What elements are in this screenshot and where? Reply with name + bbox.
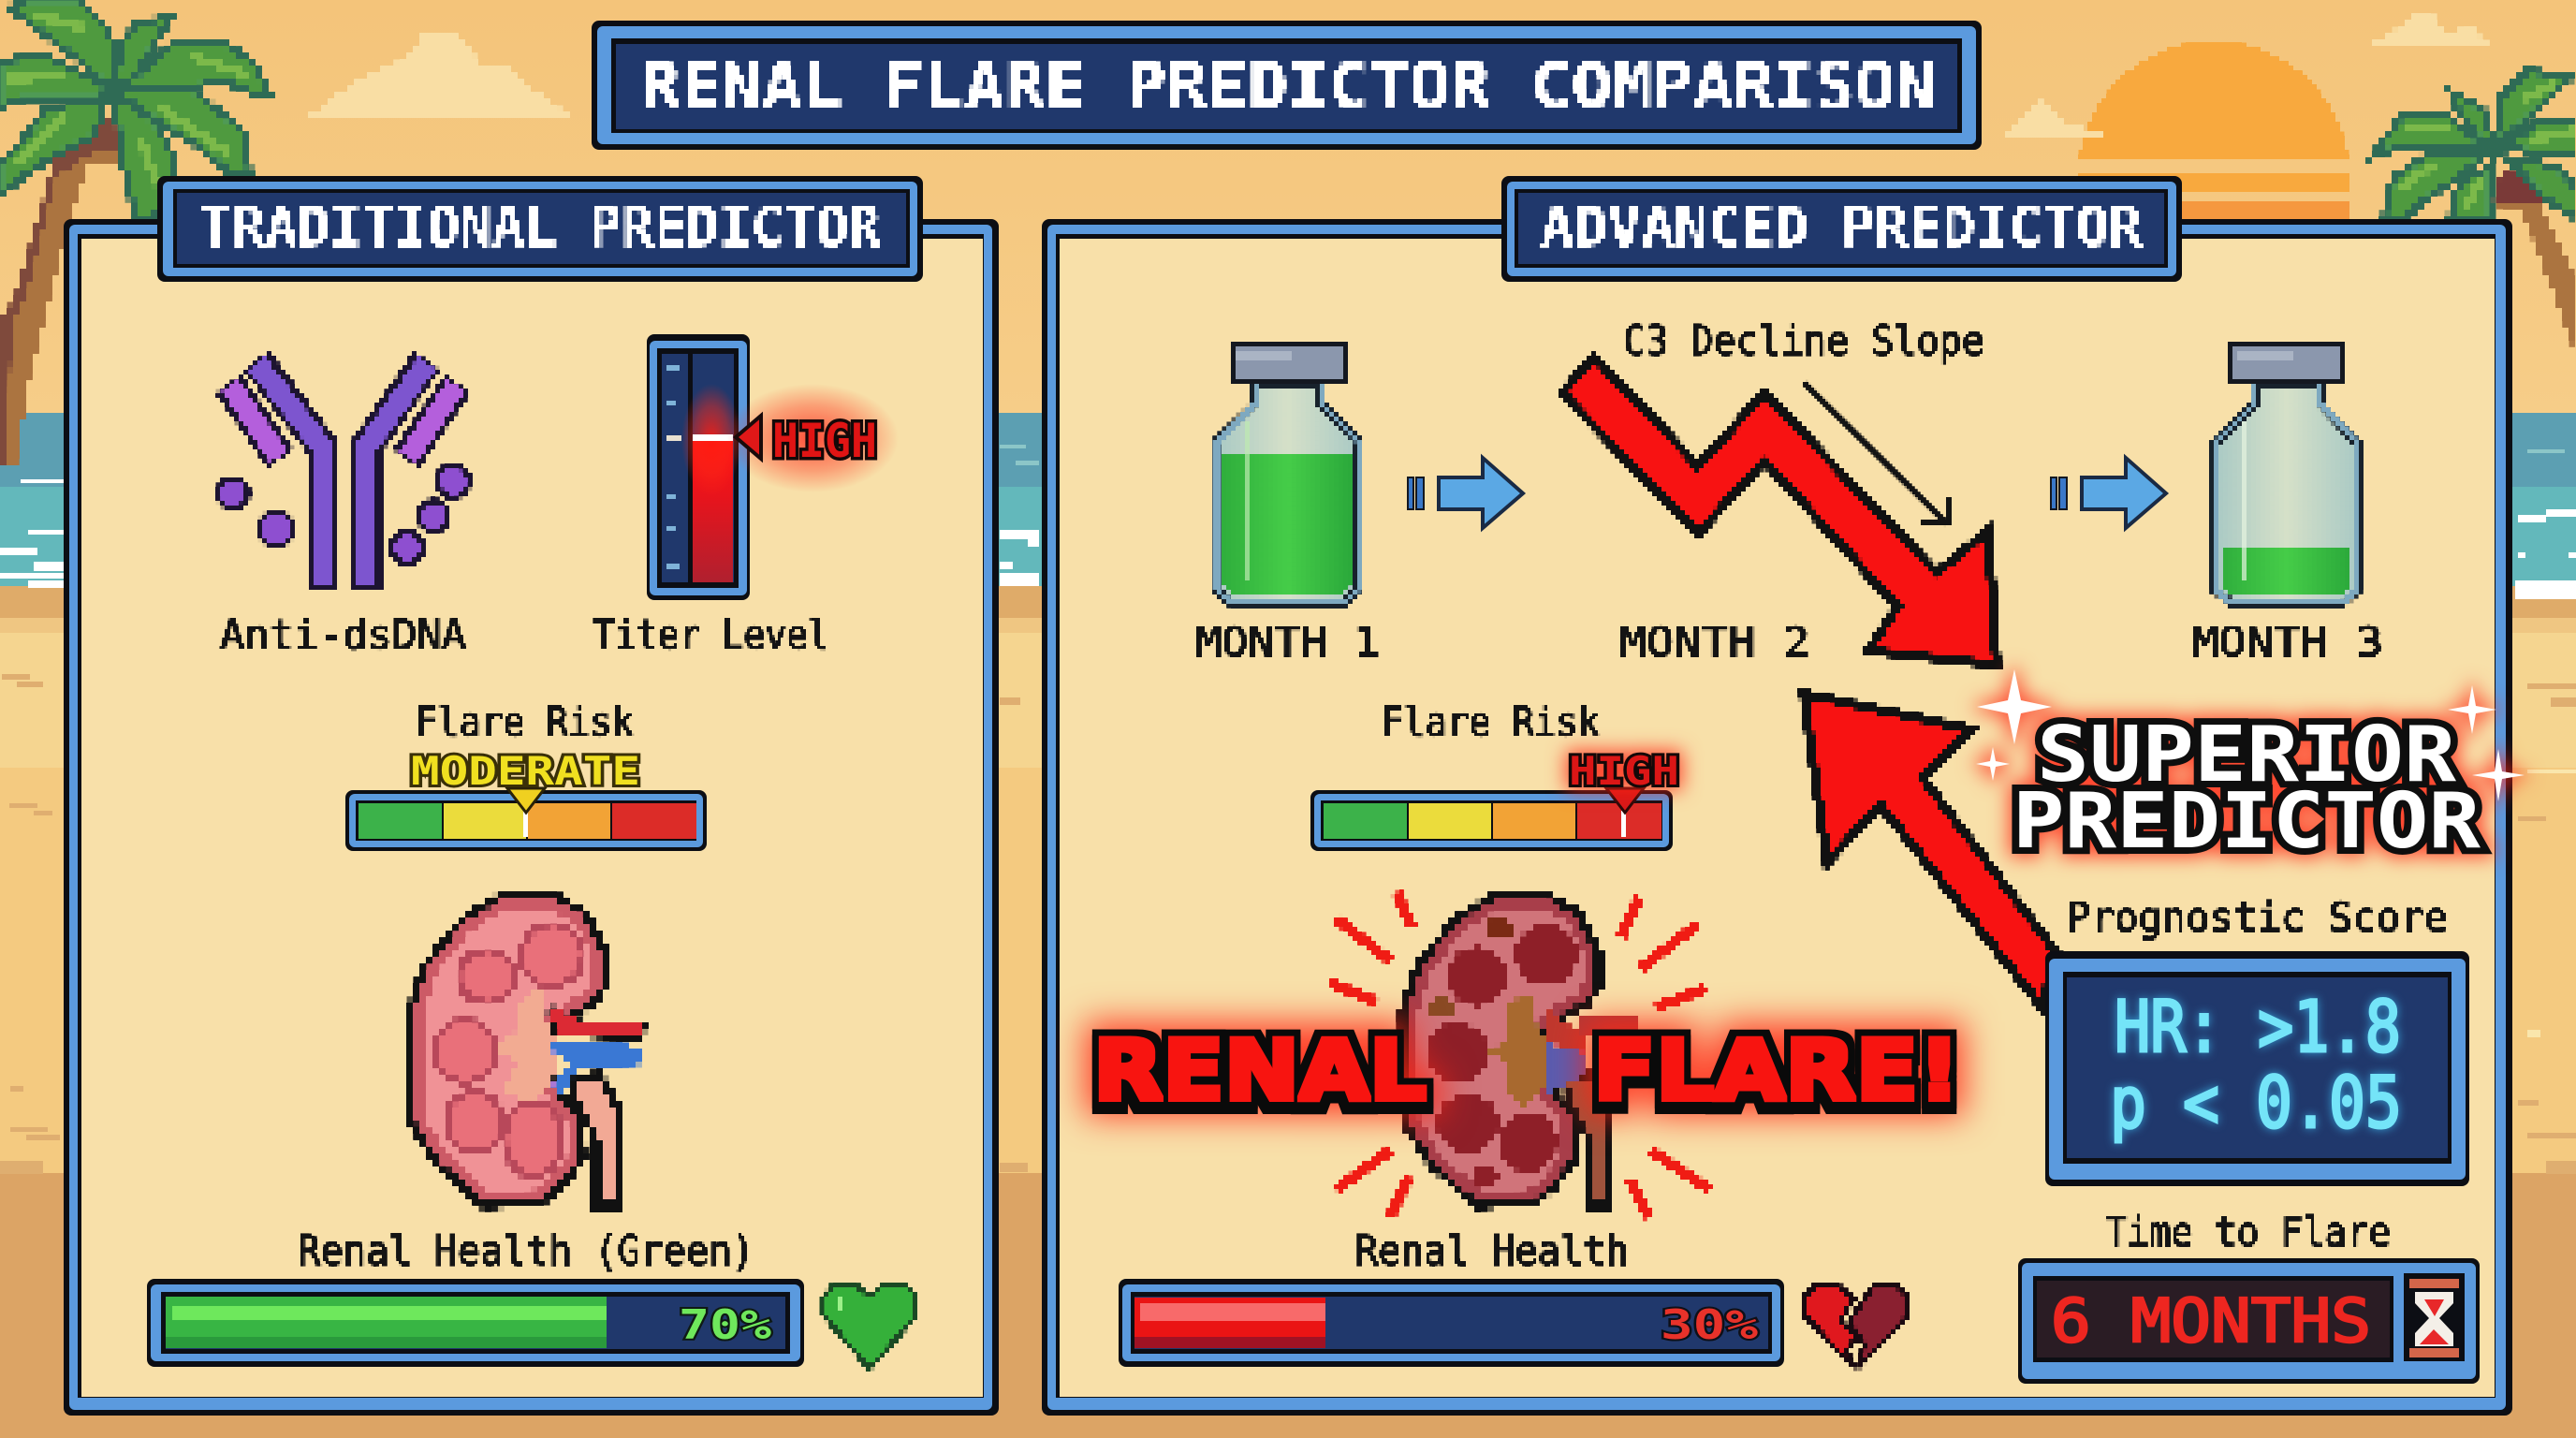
icon: hourglass [2404,1273,2465,1361]
value: 30%: 30% [1661,1301,1759,1349]
value: HR: HR: >1.8 [2115,985,2401,1068]
heading: traditional predictor [157,176,923,282]
callout: superior predictor [1976,669,2525,866]
label: month 3: MONTH 3 [2191,619,2383,667]
value: 6 months: 6 MONTHS [2051,1287,2371,1357]
label: prognostic score: Prognostic Score [2067,894,2448,942]
label: renal health green: Renal Health (Green) [298,1227,754,1275]
arrow: red pointing at flare risk [1804,694,2056,1006]
label: flare risk right: Flare Risk [1382,698,1600,746]
value: p value: p < 0.05 [2110,1061,2402,1144]
heading: traditional predictor: TRADITIONAL PREDICTOR [200,195,882,260]
icon: healthy kidney [409,897,646,1206]
arrow: red zig-zag decline [1562,357,1997,665]
icon: damaged kidney [1402,897,1636,1206]
left palm tree [0,0,269,466]
heading: advanced predictor [1501,176,2182,282]
callout: superior predictor: PREDICTOR [2012,777,2481,866]
callout: superior predictor: SUPERIOR [2037,711,2457,800]
panel: time to flare [2018,1258,2480,1384]
label: C3 decline slope: C3 Decline Slope [1623,317,1984,365]
icon: broken heart [1805,1284,1908,1369]
arrow: month 1 to 2 [1408,458,1523,528]
icon: sparkles [1976,669,2525,801]
title: RENAL FLARE PREDICTOR COMPARISON [640,48,1936,125]
icon: vial month 3 [2216,344,2357,603]
clouds [309,16,2499,139]
callout: renal flare: RENAL [1093,1022,1427,1119]
icon: titer level gauge [647,334,750,600]
value: 70%: 70% [679,1301,772,1349]
label: Titer Level: Titer Level [593,611,829,659]
icon: antibody [218,360,469,591]
bar: renal health 70% [147,1279,804,1367]
label: renal health: Renal Health [1355,1227,1629,1275]
gauge: high flare risk [1310,748,1679,851]
arrow: month 2 to 3 [2051,458,2166,528]
callout: high: HIGH [1569,748,1679,794]
panel: advanced predictor [1042,219,2512,1416]
sun [2079,41,2349,218]
panel: traditional predictor [64,219,999,1416]
icon: impact rays [1330,892,1710,1217]
callout: titer high: HIGH [772,414,877,468]
label: time to flare: Time to Flare [2105,1209,2391,1256]
right palm tree [2373,70,2576,356]
label: month 2: MONTH 2 [1619,619,1810,667]
title [592,21,1982,150]
arrow: thin slope arrow [1804,382,1950,524]
gauge: moderate flare risk [345,748,707,851]
panel: prognostic score [2045,951,2469,1186]
callout: titer high [726,384,899,492]
label: Anti-dsDNA: Anti-dsDNA [220,611,466,659]
icon: vial month 1 [1217,344,1358,603]
callout: moderate: MODERATE [411,748,640,794]
callout: renal flare [1093,1022,1960,1119]
label: flare risk left: Flare Risk [416,698,634,746]
icon: green heart [824,1284,916,1369]
callout: renal flare: FLARE! [1593,1022,1960,1119]
label: month 1: MONTH 1 [1195,619,1380,667]
bar: renal health 30% [1119,1279,1784,1367]
heading: advanced predictor: ADVANCED PREDICTOR [1541,195,2144,260]
